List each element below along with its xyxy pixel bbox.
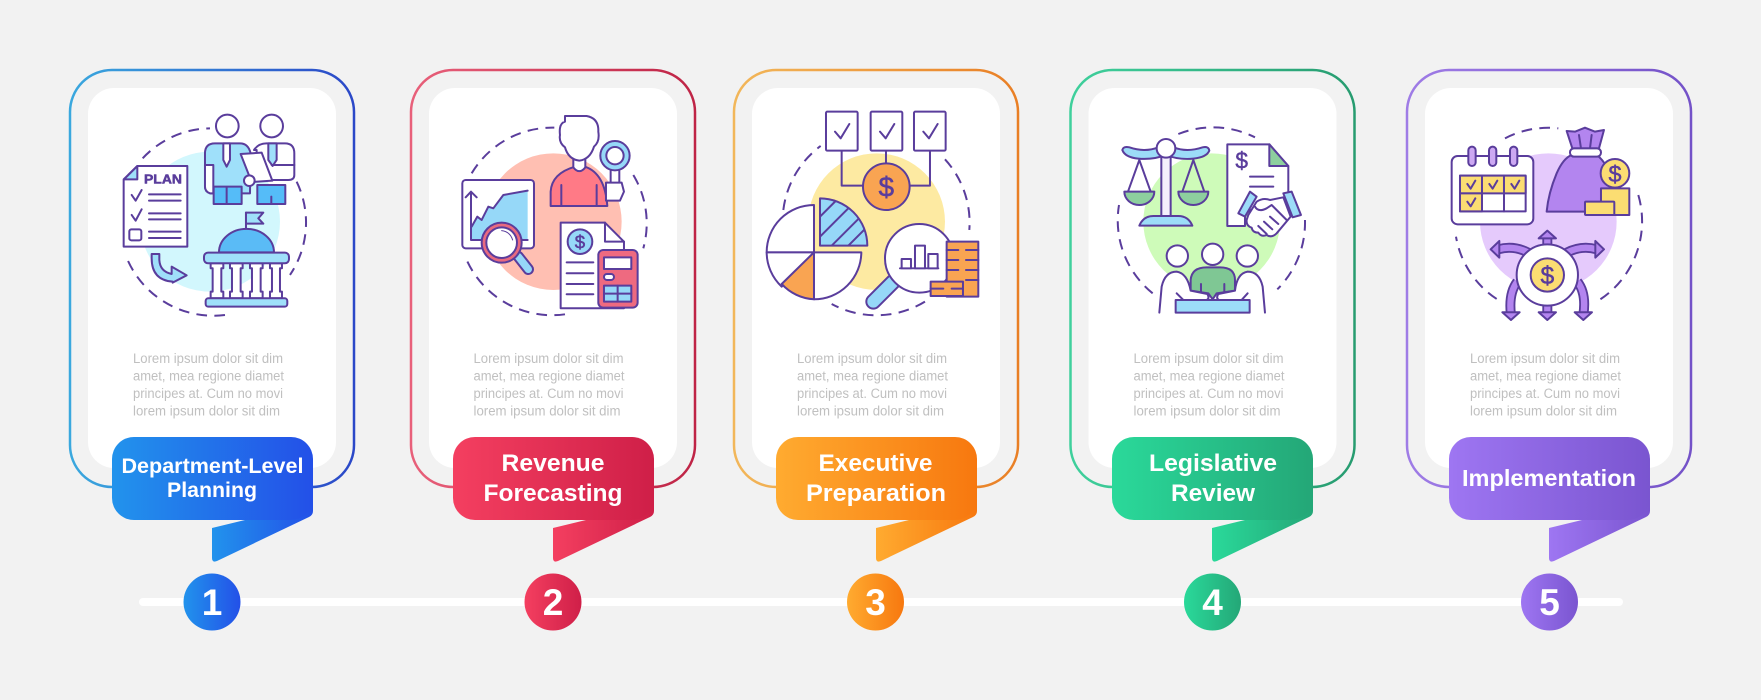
icon: analyst, chart and calculator: $ — [575, 231, 586, 252]
body text: lorem ipsum dolor sit dim — [133, 404, 280, 418]
label badge: Forecasting — [484, 480, 622, 507]
icon: scales, contract and committee — [1118, 127, 1305, 313]
white card — [1425, 88, 1673, 468]
icon: calendar, money bag and fund distribution — [1452, 128, 1642, 320]
icon: analyst, chart and calculator — [462, 116, 647, 315]
icon: calendar, money bag and fund distribution: $ — [1540, 263, 1554, 290]
step number 1: 1 — [202, 582, 222, 623]
label badge: Legislative — [1149, 450, 1277, 477]
body text: amet, mea regione diamet — [797, 368, 948, 384]
icon: approvals, pie chart and coins: $ — [879, 172, 895, 203]
step number 3 — [847, 574, 904, 630]
icon: approvals, pie chart and coins — [767, 112, 978, 315]
step number 1 — [184, 574, 240, 630]
panel: revenue forecasting — [411, 70, 695, 630]
step number 3: 3 — [865, 582, 886, 623]
body text — [1470, 351, 1621, 418]
label badge — [776, 437, 977, 562]
white card — [429, 88, 677, 468]
step number 5: 5 — [1539, 582, 1560, 623]
label badge: Preparation — [806, 480, 946, 507]
body text — [797, 351, 948, 418]
panel: executive preparation — [734, 70, 1018, 630]
panel outline — [70, 70, 354, 487]
body text: principes at. Cum no movi — [797, 386, 947, 401]
body text: lorem ipsum dolor sit dim — [1134, 404, 1280, 418]
label badge: Planning — [167, 478, 257, 502]
body text: principes at. Cum no movi — [1134, 386, 1284, 401]
label badge: Implementation — [1462, 465, 1636, 491]
label badge — [112, 437, 313, 562]
panel outline — [1070, 70, 1354, 487]
icon: plan, team and government building — [124, 115, 306, 316]
icon: scales, contract and committee: $ — [1235, 147, 1248, 173]
body text: lorem ipsum dolor sit dim — [797, 404, 944, 418]
white card — [88, 88, 336, 468]
icon: calendar, money bag and fund distribution: $ — [1608, 161, 1621, 187]
panel: legislative review — [1070, 70, 1354, 630]
step number 2: 2 — [543, 582, 563, 623]
body text: Lorem ipsum dolor sit dim — [1470, 351, 1620, 366]
panel outline — [734, 70, 1018, 487]
label badge — [1112, 437, 1313, 562]
body text: principes at. Cum no movi — [1470, 386, 1620, 401]
body text — [474, 351, 625, 418]
step number 4 — [1184, 574, 1241, 630]
body text: principes at. Cum no movi — [133, 386, 283, 401]
body text — [1134, 351, 1285, 418]
label badge: Department-Level — [122, 454, 304, 478]
body text: lorem ipsum dolor sit dim — [1470, 404, 1617, 418]
icon: plan, team and government building: PLAN — [144, 172, 182, 186]
label badge — [1449, 437, 1650, 562]
label badge: Executive — [818, 450, 932, 477]
panel outline — [411, 70, 695, 487]
panel: department-level planning — [70, 70, 354, 630]
white card — [1088, 88, 1336, 468]
step number 2 — [524, 574, 582, 630]
body text: amet, mea regione diamet — [474, 368, 625, 384]
body text: principes at. Cum no movi — [474, 386, 624, 401]
white card — [752, 88, 1000, 468]
timeline line — [139, 598, 1623, 606]
body text: Lorem ipsum dolor sit dim — [133, 351, 283, 366]
body text: Lorem ipsum dolor sit dim — [797, 351, 947, 366]
panel outline — [1407, 70, 1691, 487]
body text: amet, mea regione diamet — [1134, 368, 1285, 384]
label badge: Review — [1171, 480, 1255, 507]
step number 4: 4 — [1202, 582, 1223, 623]
step number 5 — [1521, 574, 1578, 630]
body text: amet, mea regione diamet — [133, 368, 284, 384]
body text: Lorem ipsum dolor sit dim — [1134, 351, 1284, 366]
body text: Lorem ipsum dolor sit dim — [474, 351, 624, 366]
infographic — [68, 68, 1692, 630]
label badge — [453, 437, 654, 562]
body text — [133, 351, 284, 418]
body text: amet, mea regione diamet — [1470, 368, 1621, 384]
label badge: Revenue — [502, 450, 604, 477]
body text: lorem ipsum dolor sit dim — [474, 404, 620, 418]
panel: implementation — [1407, 70, 1691, 630]
